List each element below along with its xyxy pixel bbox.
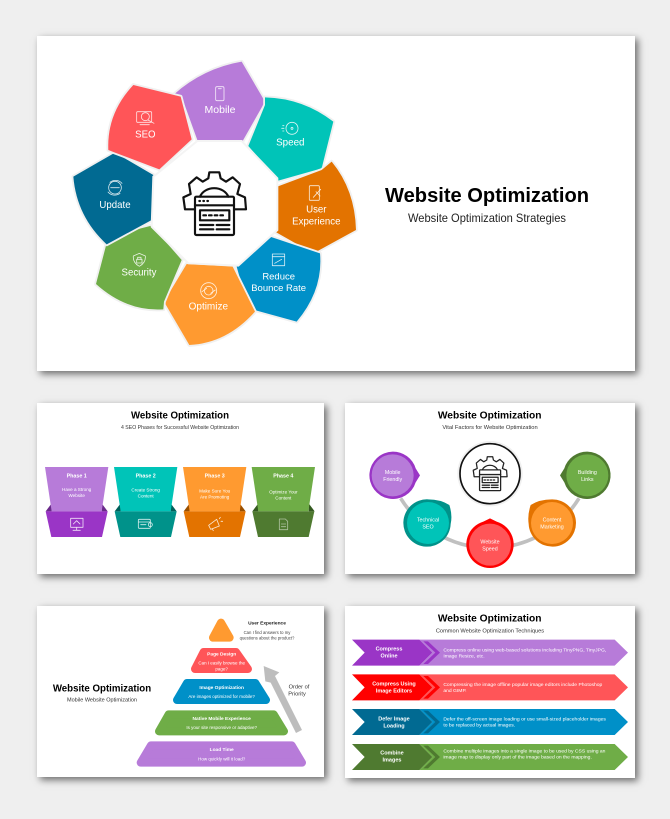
icon: document	[279, 519, 288, 530]
label: seo: SEO	[135, 130, 156, 141]
row: compress online: Compress online using web-based solutions including TinyPNG, TinyJPG,	[443, 647, 606, 653]
icon: update circular arrows	[108, 180, 122, 195]
petal: user experience	[275, 162, 356, 253]
subheading: Mobile Website Optimization	[67, 698, 137, 704]
phase 1	[45, 467, 108, 537]
row: compress online: Online	[380, 654, 398, 660]
arrow: order of priority	[264, 666, 302, 733]
wheel diagram	[73, 62, 356, 345]
node: content marketing: Marketing	[540, 525, 564, 531]
level: image optimization: Are images optimized for mobile?	[188, 694, 255, 699]
label: order of priority: Priority	[288, 692, 306, 698]
row: compress using image editors: Compress Using	[372, 681, 416, 687]
label: user experience: Experience	[292, 216, 340, 227]
node: building links: Building	[578, 470, 597, 476]
row: combine images: Combine multiple images into a single image to be used by CSS using an	[443, 748, 606, 754]
petal: security	[96, 226, 182, 310]
row: compress using image editors: Compressing the image offline popular image editors include Photoshop	[443, 682, 603, 688]
label: speed: Speed	[276, 137, 305, 148]
label: user experience: User	[306, 205, 327, 216]
node: mobile friendly	[369, 452, 420, 499]
connecting arc	[401, 498, 579, 548]
level: page design: page?	[215, 666, 228, 671]
level: native mobile experience: Native Mobile Experience	[193, 716, 251, 722]
phase 4: Content	[275, 496, 292, 501]
panel: 4 seo phases	[37, 403, 324, 574]
node: content marketing: Content	[543, 518, 562, 524]
icon: shield lock	[133, 253, 145, 266]
level: image optimization	[177, 683, 266, 700]
row: combine images: image map to display only part of the image based on the mapping.	[443, 754, 592, 760]
panel: mobile optimization pyramid	[37, 606, 324, 777]
icon: megaphone	[209, 517, 223, 531]
node: website speed: Speed	[482, 546, 498, 552]
label: security: Security	[122, 268, 157, 279]
level: page design: Page Design	[207, 652, 236, 658]
node: technical seo: SEO	[422, 525, 434, 531]
level: image optimization: Image Optimization	[199, 685, 244, 691]
icon: speedometer	[282, 122, 298, 134]
level: user experience: Can I find answers to my	[244, 630, 291, 635]
row: combine images: Images	[383, 758, 401, 764]
level: user experience	[213, 621, 295, 640]
level: page design: Can I easily browse the	[198, 661, 245, 666]
label: optimize: Optimize	[189, 301, 228, 312]
petal: mobile	[174, 62, 265, 141]
label: reduce bounce rate: Bounce Rate	[251, 283, 306, 294]
row: compress using image editors: and GIMP.	[443, 688, 467, 694]
level: load time: How quickly will it load?	[198, 756, 246, 761]
phase 4	[252, 467, 315, 537]
row: compress using image editors: Image Editors	[376, 688, 412, 694]
phase 2: Content	[138, 494, 154, 499]
label: mobile: Mobile	[205, 105, 236, 116]
heading: Website Optimization	[131, 410, 229, 421]
icon: user experience phone	[309, 186, 321, 200]
heading: Website Optimization	[53, 683, 151, 694]
icon: phone	[216, 87, 224, 101]
icon: bounce browser	[272, 254, 285, 266]
heading: Website Optimization	[438, 410, 541, 421]
panel: optimization techniques	[345, 606, 635, 778]
phase 2: Phase 2	[136, 473, 156, 479]
phase 3: Make Sure You	[199, 488, 231, 493]
node: website speed: Website	[480, 539, 500, 545]
icon: seo screen	[137, 112, 154, 125]
row: compress online: Compress	[376, 647, 402, 653]
row: compress using image editors	[352, 674, 628, 700]
phase 1: Phase 1	[67, 473, 87, 479]
heading: Website Optimization	[438, 614, 541, 625]
label: order of priority: Order of	[289, 685, 310, 691]
icon: monitor	[71, 518, 83, 530]
node: technical seo	[403, 499, 451, 547]
node: building links: Links	[581, 477, 594, 483]
heading: website optimization: Website Optimization	[385, 185, 589, 207]
phase 2	[114, 467, 177, 537]
phase 4: Phase 4	[273, 473, 293, 479]
petal: seo	[108, 85, 192, 169]
level: load time	[141, 745, 302, 763]
icon: gear with browser window	[183, 172, 246, 235]
icon: content card	[138, 519, 152, 528]
subheading: strategies: Website Optimization Strategies	[408, 211, 566, 225]
row: defer image loading	[352, 709, 628, 735]
level: page design	[195, 652, 248, 671]
label: reduce bounce rate: Reduce	[262, 272, 295, 283]
petal: reduce bounce rate	[237, 237, 320, 322]
level: native mobile experience: Is your site responsive or adaptive?	[186, 725, 257, 730]
icon: gear with browser window	[473, 457, 507, 491]
central gear circle	[457, 441, 523, 506]
row: compress online: Image Resize, etc.	[443, 653, 485, 659]
subheading: Common Website Optimization Techniques	[436, 628, 544, 634]
panel: main website optimization wheel	[37, 36, 635, 371]
node: content marketing	[528, 499, 576, 547]
phase 3: Are Promoting	[200, 494, 230, 499]
phase 3	[183, 467, 246, 537]
node: mobile friendly: Mobile	[385, 470, 401, 476]
level: load time: Load Time	[210, 747, 234, 753]
petal: speed	[248, 97, 333, 181]
row: combine images	[352, 744, 628, 770]
row: defer image loading: Defer Image	[378, 716, 410, 722]
level: native mobile experience	[159, 714, 284, 731]
phase 1: Have a Strong	[62, 487, 92, 492]
row: defer image loading: Defer the off-screen image loading or use small-sized placeholder images	[443, 717, 606, 723]
row: compress online	[352, 640, 628, 666]
node: building links	[560, 452, 611, 499]
center octagon	[152, 141, 277, 266]
row: defer image loading: Loading	[383, 723, 405, 729]
node: website speed	[466, 518, 514, 568]
subheading: 4 SEO Phases for Successful Website Optimization	[121, 425, 239, 431]
node: mobile friendly: Friendly	[383, 477, 402, 483]
petal: update	[73, 153, 153, 244]
phase 1: Website	[68, 493, 85, 498]
panel: vital factors	[345, 403, 635, 574]
row: defer image loading: to be replaced by actual images.	[443, 723, 515, 729]
subheading: Vital Factors for Website Optimization	[442, 425, 538, 431]
level: user experience: questions about the product?	[240, 635, 295, 640]
level: user experience: User Experience	[248, 621, 286, 627]
phase 3: Phase 3	[205, 473, 225, 479]
petal: optimize	[164, 264, 255, 345]
row: combine images: Combine	[380, 751, 404, 757]
phase 4: Optimize Your	[269, 490, 298, 495]
icon: optimize gear	[201, 283, 217, 299]
node: technical seo: Technical	[417, 518, 439, 524]
phase 2: Create Strong	[131, 488, 160, 493]
label: update: Update	[99, 200, 131, 211]
